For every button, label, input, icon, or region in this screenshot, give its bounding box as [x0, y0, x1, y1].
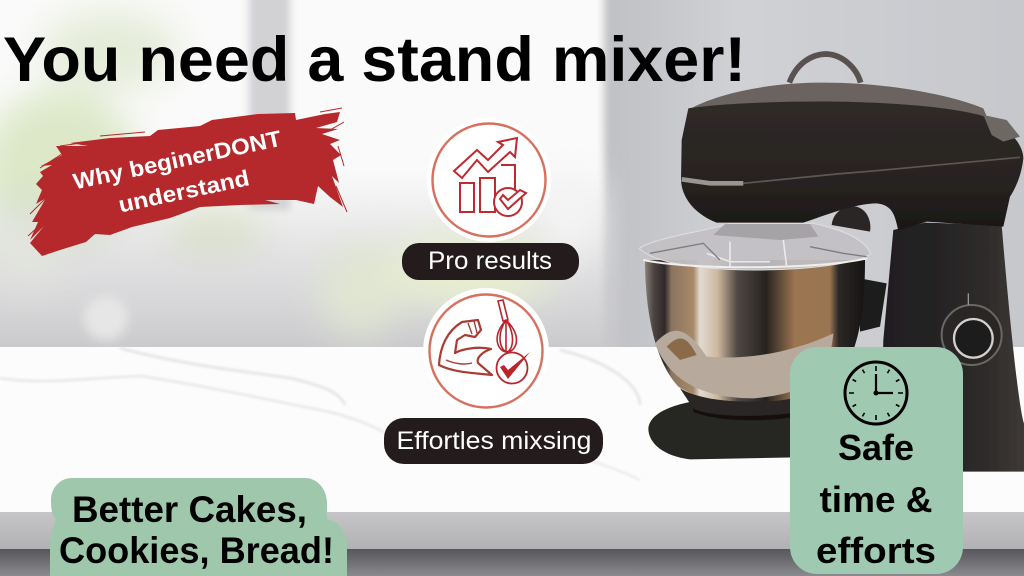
red brush banner — [28, 108, 347, 256]
head button panel — [983, 115, 1020, 142]
trend arrow — [454, 138, 517, 178]
head silver trim — [682, 179, 743, 183]
icon: arm and whisk badge — [423, 288, 549, 414]
mixer head lip — [688, 83, 997, 140]
icon: growth chart badge — [427, 118, 551, 242]
whisk — [497, 300, 516, 352]
flexed arm — [439, 320, 492, 375]
mixer base — [648, 398, 837, 459]
banner text: understand — [116, 165, 251, 217]
rear joint — [860, 278, 887, 332]
check badge — [494, 188, 522, 216]
pill: Effortles mixsing: Effortles mixsing — [396, 427, 592, 455]
card: Safe time and efforts: efforts — [816, 530, 936, 571]
card: Safe time and efforts — [790, 347, 963, 574]
background: blurred window and wall — [0, 0, 1024, 360]
card: Better Cakes: Better Cakes, — [72, 489, 307, 530]
card: Better Cakes: Cookies, Bread! — [59, 530, 334, 571]
speed dial — [942, 293, 1002, 365]
card: Better Cakes — [50, 478, 347, 576]
mixer column — [879, 223, 1024, 472]
steel bowl — [645, 260, 865, 402]
brush bristles — [28, 108, 347, 236]
glass lid — [639, 223, 871, 270]
marble countertop — [0, 347, 1024, 576]
banner text — [71, 126, 290, 226]
check mark — [496, 352, 528, 384]
title: You need a stand mixer! — [3, 25, 746, 95]
card: Safe time and efforts: Safe — [838, 427, 914, 468]
brush stroke — [30, 112, 343, 256]
pill: Pro results — [402, 243, 579, 280]
mixer handle — [789, 54, 861, 83]
banner text: Why beginerDONT — [71, 126, 284, 194]
mixer head — [681, 102, 1023, 231]
card: Safe time and efforts: time & — [820, 479, 932, 520]
pill: Pro results: Pro results — [428, 247, 552, 275]
pill: Effortles mixsing — [384, 418, 603, 464]
stand mixer illustration — [639, 54, 1024, 472]
icon: clock — [845, 362, 907, 424]
bars — [460, 165, 515, 212]
